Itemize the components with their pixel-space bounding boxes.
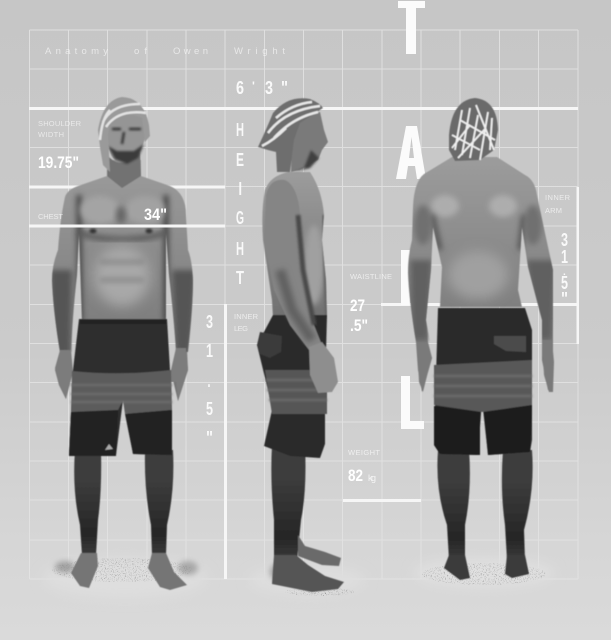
pocket [494, 336, 526, 352]
stat: waistline: WAISTLINE [350, 272, 392, 281]
beard [108, 144, 144, 164]
stat: waistline: .5" [350, 316, 368, 335]
face [291, 112, 328, 172]
vertical word HEIGHT: I [238, 178, 242, 199]
legs [74, 450, 173, 555]
stat: inner leg [206, 311, 259, 448]
shorts [69, 319, 172, 456]
stat: inner leg: 3 [206, 311, 213, 332]
stat: chest [38, 205, 167, 224]
legs [437, 450, 533, 560]
vertical word HEIGHT: T [236, 267, 244, 288]
stat: height 6'3": ' [252, 79, 255, 93]
stat: inner arm: INNER [545, 193, 571, 202]
measurement grid [30, 30, 578, 579]
stat: shoulder width: SHOULDER [38, 119, 82, 128]
figure: side view [257, 98, 344, 592]
hands [417, 340, 554, 392]
stat: inner arm: 3 [561, 229, 568, 250]
torso and arms [408, 157, 553, 392]
stat: height 6'3": " [281, 77, 288, 98]
shorts [257, 315, 327, 458]
letter L lower [401, 376, 424, 429]
stat: shoulder width: 19.75" [38, 153, 79, 172]
body shading [304, 215, 327, 320]
title word TALL [396, 1, 426, 429]
front foot [272, 555, 344, 592]
stat: inner arm [545, 193, 571, 309]
stat: inner arm: 5 [561, 272, 568, 293]
feet [444, 555, 529, 580]
stat: height 6'3": 6 [236, 77, 244, 98]
heading: Anatomy of Owen Wright: Wright [234, 46, 285, 57]
heading: Anatomy of Owen Wright: of [134, 46, 147, 57]
stat: inner arm: . [563, 267, 566, 278]
stat: inner arm: 1 [561, 246, 568, 267]
stat: inner leg: 5 [206, 398, 213, 419]
vertical word HEIGHT: H [236, 119, 244, 140]
letter L upper [401, 250, 410, 305]
stat: chest: 34" [144, 205, 167, 224]
pocket [257, 332, 282, 358]
letter T [398, 1, 425, 54]
stat: weight: 82 [348, 466, 363, 485]
stat: weight [348, 448, 380, 485]
stat: height 6'3" [236, 77, 288, 98]
vertical word HEIGHT: G [236, 207, 244, 228]
stat: weight: kg [368, 473, 376, 483]
stat: waistline [350, 272, 392, 335]
stat: height 6'3": 3 [265, 77, 273, 98]
vertical word HEIGHT: E [236, 149, 244, 170]
hair [258, 98, 323, 172]
stat: inner leg: " [206, 427, 213, 448]
stat: weight: WEIGHT [348, 448, 380, 457]
stat: waistline: 27 [350, 296, 365, 315]
stat: inner arm: ARM [545, 206, 562, 215]
thick measurement rules [29, 107, 579, 579]
stat: inner leg: 1 [206, 340, 213, 361]
neck and face [107, 112, 147, 166]
stat: shoulder width [38, 119, 82, 172]
stat: chest: CHEST [38, 212, 63, 221]
stat: inner arm: " [561, 288, 568, 309]
rear foot [298, 535, 341, 566]
sand under figures [43, 558, 554, 598]
vertical word HEIGHT [236, 119, 244, 288]
hair [449, 98, 498, 161]
feet [71, 553, 187, 590]
figure: back view [408, 98, 556, 580]
legs [271, 445, 306, 560]
hands [55, 348, 188, 401]
arms and torso [52, 160, 193, 401]
stat: inner leg: . [208, 370, 210, 391]
eyes and brow [112, 129, 141, 144]
stat: inner leg: LEG [234, 324, 248, 333]
vertical word HEIGHT: H [236, 238, 244, 259]
back muscle shading [410, 180, 556, 340]
stat: shoulder width: WIDTH [38, 130, 64, 139]
figure: front view [50, 97, 196, 590]
muscle shading [50, 195, 196, 360]
arm and hand [264, 180, 322, 350]
hair [98, 97, 150, 172]
heading: Anatomy of Owen Wright: Owen [173, 46, 208, 57]
heading: Anatomy of Owen Wright [45, 46, 285, 57]
letter A [396, 126, 426, 179]
body [262, 172, 327, 318]
stat: inner leg: INNER [234, 312, 259, 321]
heading: Anatomy of Owen Wright: Anatomy [45, 46, 108, 57]
shorts [434, 308, 532, 455]
rule across chest [29, 224, 225, 228]
